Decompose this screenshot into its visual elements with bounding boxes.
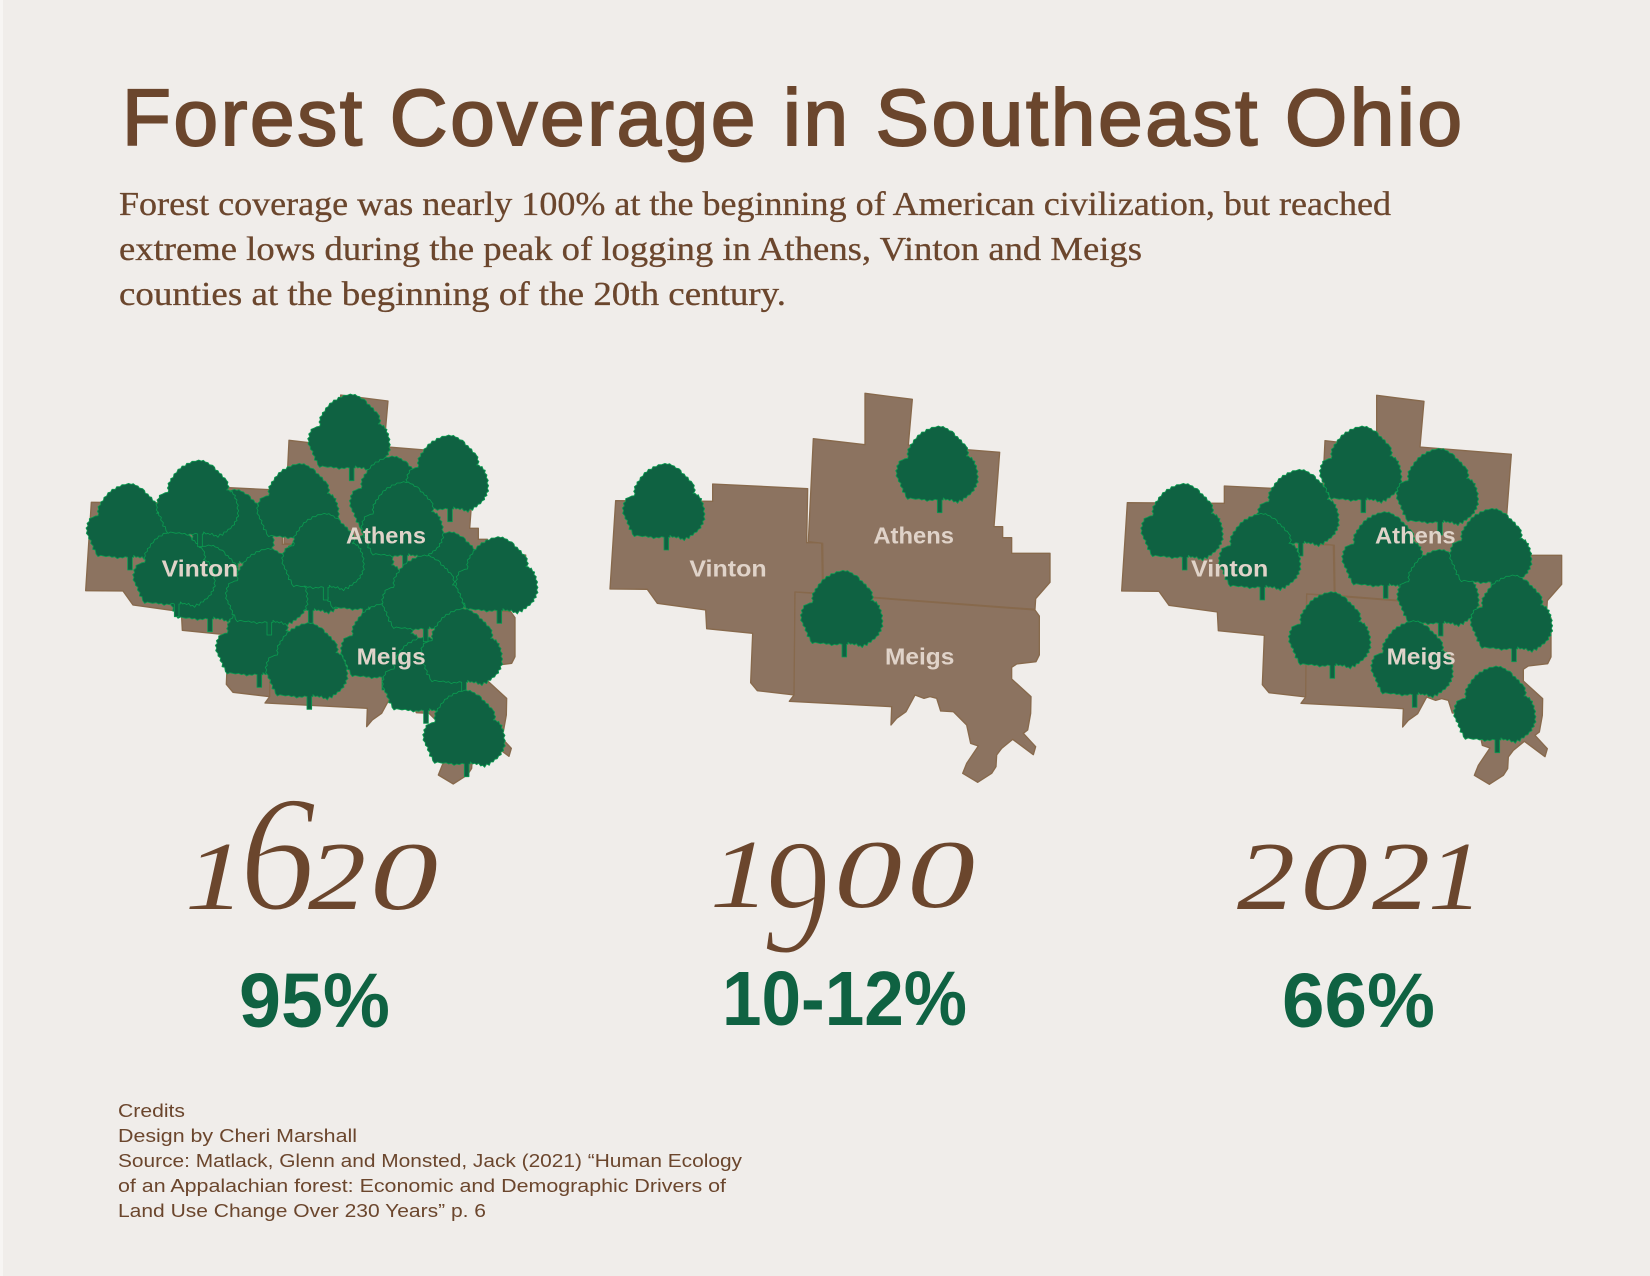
credits — [118, 1100, 743, 1221]
year: 1620: 6 — [240, 762, 316, 945]
year: 2021: 2 — [1372, 823, 1430, 930]
map: 1900 county map with three trees: Meigs — [885, 643, 954, 669]
stat: 10-12%: 10-12% — [722, 956, 967, 1042]
year: 2021: 2 — [1237, 823, 1295, 930]
map: 1620 county map with dense trees: Meigs — [357, 643, 426, 669]
title: Forest Coverage in Southeast Ohio — [122, 73, 1462, 162]
year: 2021: 1 — [1428, 823, 1483, 930]
credits: of an Appalachian forest: Economic and Demographic Drivers of — [118, 1175, 727, 1196]
year: 2021: 0 — [1300, 823, 1368, 930]
year: 1900: 0 — [834, 821, 902, 928]
credits: Design by Cheri Marshall — [118, 1125, 357, 1146]
map: 2021 county map with twelve trees: Meigs — [1387, 643, 1456, 669]
map: 1900 county map with three trees: Vinton — [689, 556, 767, 582]
map: 2021 county map with twelve trees — [1122, 395, 1562, 784]
map: 2021 county map with twelve trees: Athens — [1375, 522, 1456, 548]
intro text: counties at the beginning of the 20th century. — [119, 276, 786, 313]
stat: 95%: 95% — [239, 958, 390, 1044]
map: 1900 county map with three trees: Athens — [873, 522, 954, 548]
credits: Credits — [118, 1100, 185, 1121]
map: 1620 county map with dense trees: Athens — [346, 522, 426, 548]
credits: Land Use Change Over 230 Years” p. 6 — [118, 1200, 486, 1221]
map: 2021 county map with twelve trees: Vinton — [1191, 556, 1268, 582]
credits: Source: Matlack, Glenn and Monsted, Jack (2021) “Human Ecology — [118, 1150, 743, 1171]
year: 1620: 1 — [185, 823, 245, 930]
map: 1620 county map with dense trees: Vinton — [162, 556, 238, 582]
year: 1900: 1 — [710, 821, 770, 928]
stat: 66%: 66% — [1282, 958, 1435, 1044]
intro text: extreme lows during the peak of logging in Athens, Vinton and Meigs — [119, 231, 1142, 268]
year: 1900: 0 — [907, 821, 975, 928]
year: 1900: 9 — [762, 805, 828, 988]
year: 1620: 0 — [370, 823, 438, 930]
year: 1620: 2 — [308, 823, 366, 930]
intro text — [119, 186, 1391, 313]
map: 1620 county map with dense trees — [86, 394, 538, 784]
intro text: Forest coverage was nearly 100% at the beginning of American civilization, but reached — [119, 186, 1391, 223]
map: 1900 county map with three trees — [610, 393, 1050, 782]
